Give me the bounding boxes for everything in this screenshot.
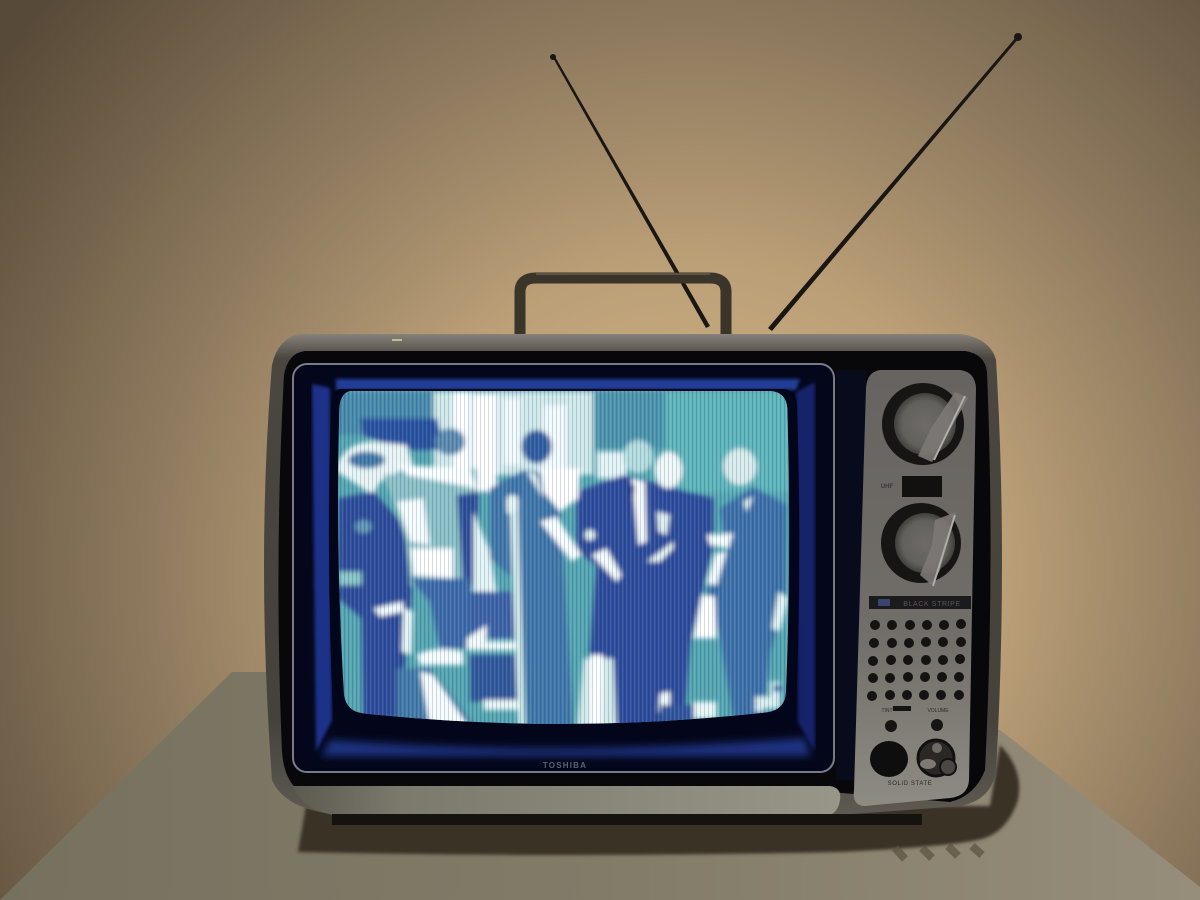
earphone socket — [918, 740, 956, 776]
screen surround — [293, 364, 834, 772]
dark frame around tube — [329, 389, 799, 740]
channel indicator window — [902, 476, 942, 497]
carrying handle — [520, 274, 726, 334]
black badge strip — [869, 596, 971, 609]
indicator label: UHF — [881, 484, 893, 490]
small label: left control — [881, 706, 911, 714]
small label: left control: TINT — [881, 708, 893, 714]
TV screen image — [330, 385, 800, 735]
base vent — [332, 814, 922, 825]
front black bezel — [278, 351, 991, 802]
small label: right control: VOLUME — [927, 708, 949, 714]
bottom panel label: SOLID STATE — [888, 781, 932, 787]
bottom silver bar — [292, 786, 840, 816]
black badge strip: BLACK STRIPE — [903, 601, 961, 608]
antenna right — [768, 33, 1022, 331]
small knob left — [885, 720, 897, 732]
cabinet shell — [264, 334, 1002, 815]
inner bevel top — [336, 379, 800, 390]
right dark strip — [836, 370, 866, 780]
brand label: TOSHIBA — [543, 761, 587, 770]
blurred picture shapes — [337, 392, 790, 728]
small knob right — [931, 719, 943, 731]
shadow stripes on plinth — [895, 846, 982, 859]
screen background — [330, 385, 800, 735]
shadow under TV — [298, 745, 1019, 855]
speaker grille — [867, 619, 966, 701]
channel dial — [882, 383, 968, 465]
plinth table top — [0, 672, 1200, 900]
control panel — [854, 370, 976, 806]
inner bevel left glow — [312, 384, 332, 752]
antenna left — [550, 54, 710, 328]
panel plate — [854, 370, 976, 806]
top highlight — [392, 339, 402, 341]
power button — [870, 741, 908, 777]
TV body — [264, 334, 1002, 825]
inner bevel bottom reflection — [322, 738, 810, 756]
scan lines — [330, 385, 800, 735]
inner bevel right — [796, 382, 815, 752]
tuning dial — [881, 503, 961, 586]
